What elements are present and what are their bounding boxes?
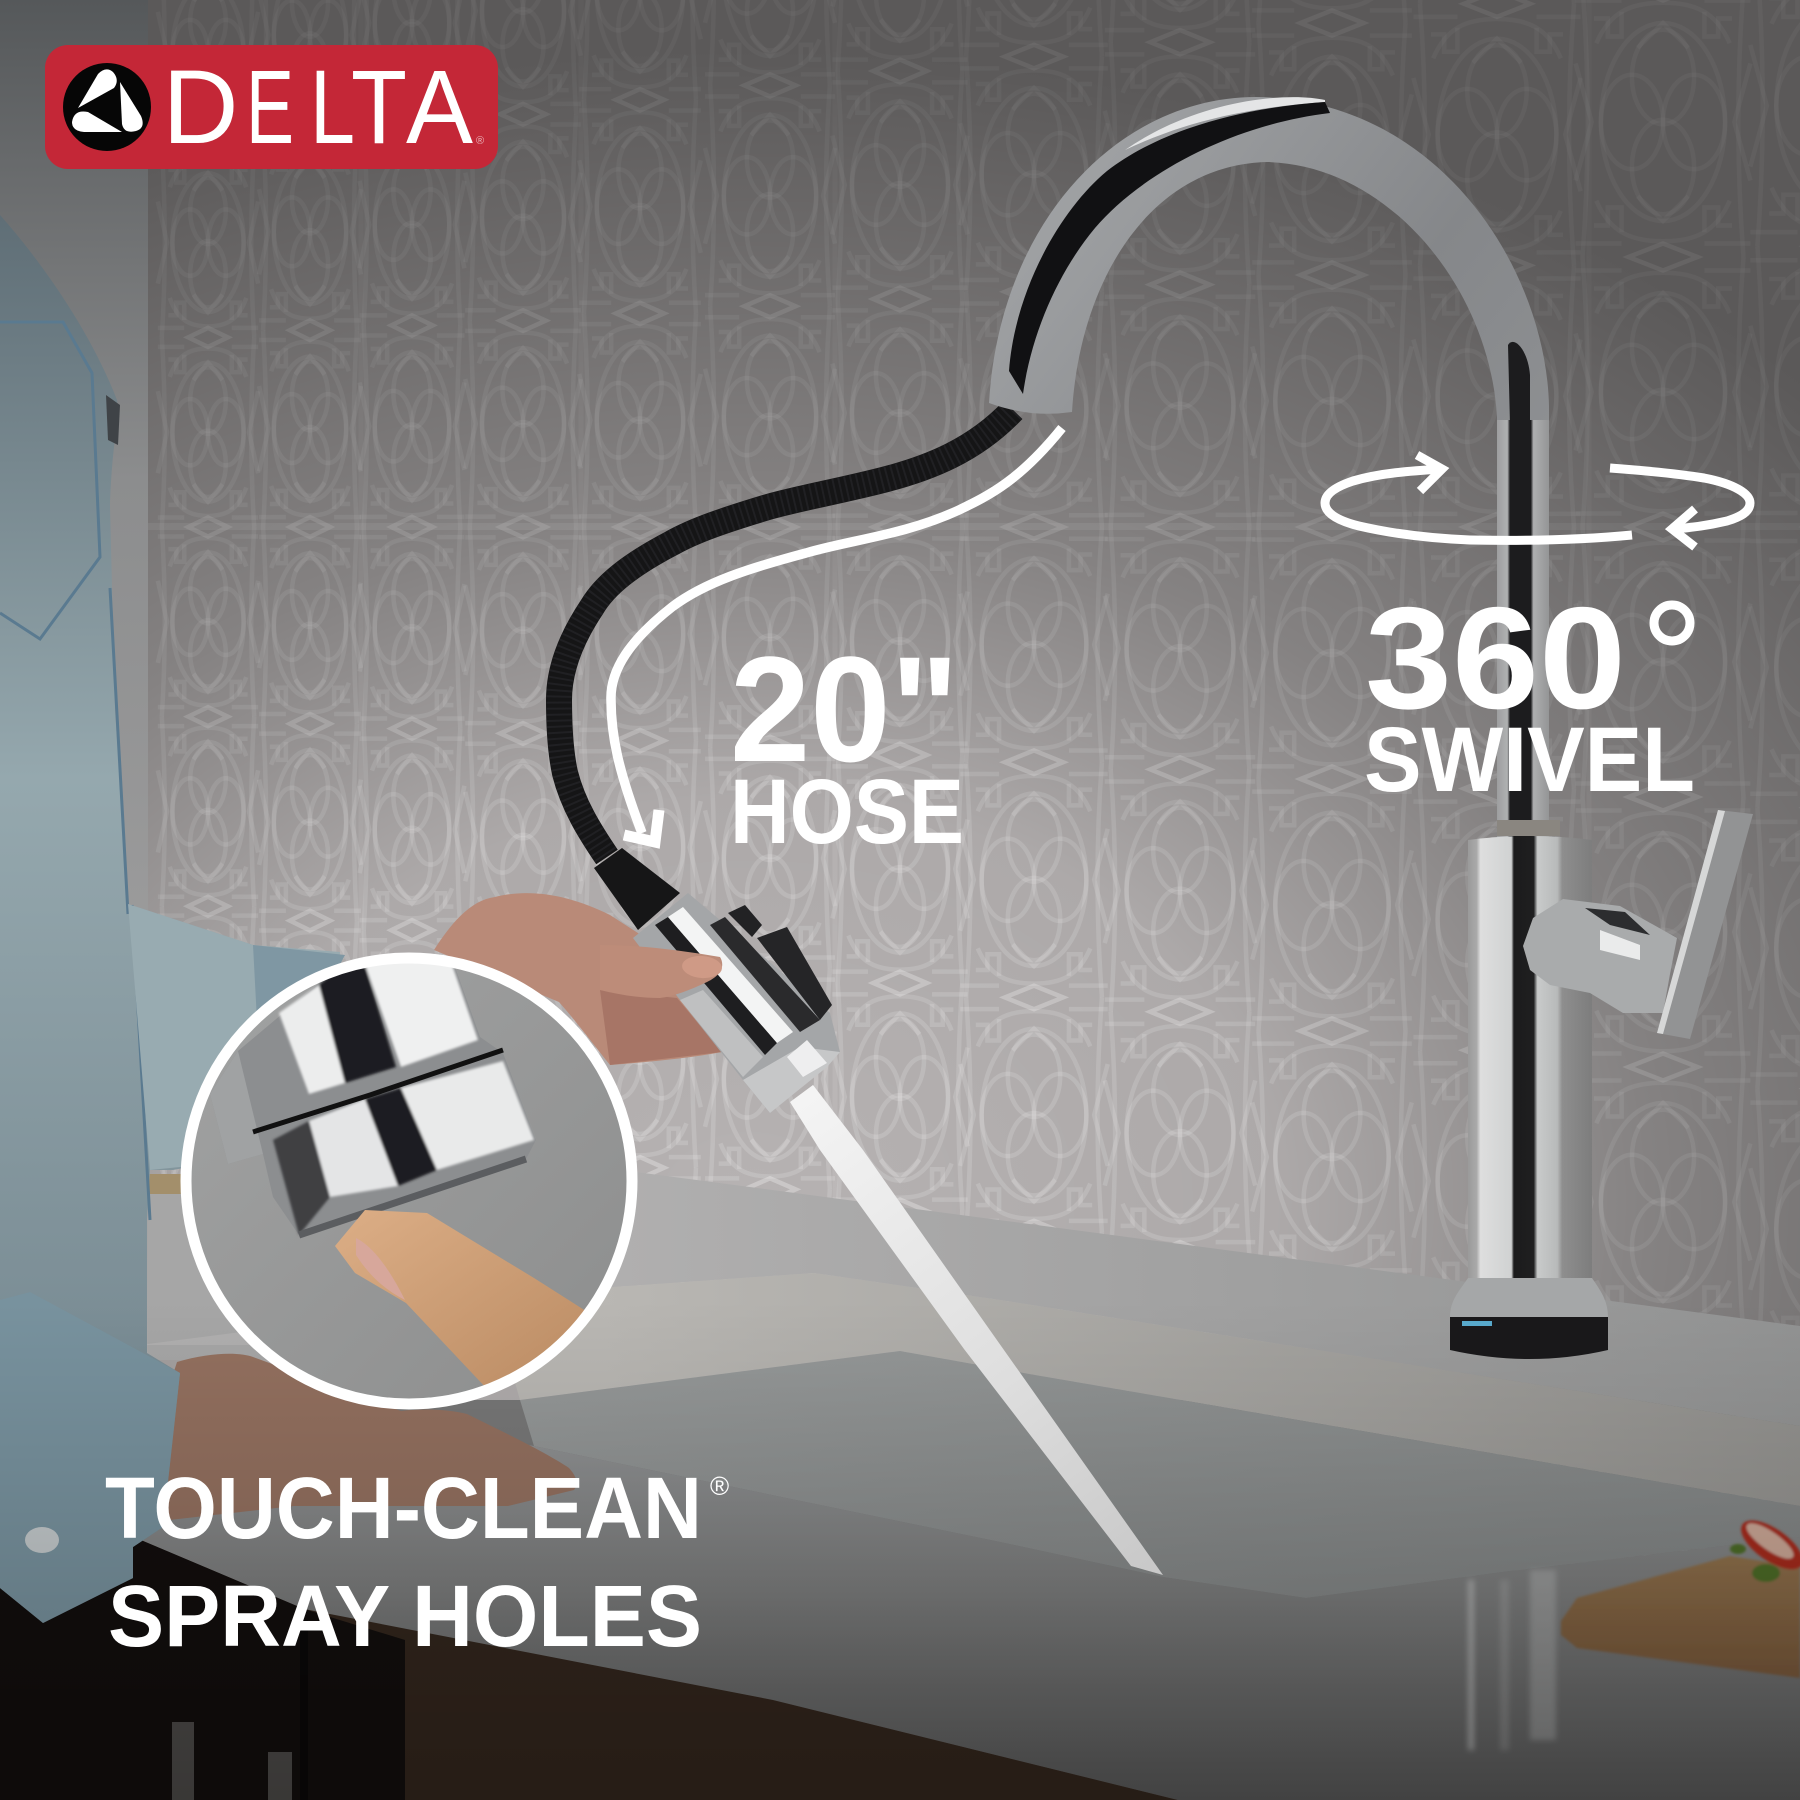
360 swivel label <box>1364 577 1695 811</box>
front counter <box>136 1380 1800 1800</box>
back counter surface <box>140 1172 1800 1426</box>
blue indicator <box>1462 1321 1492 1326</box>
hose <box>559 410 1013 857</box>
water stream <box>790 1085 1163 1575</box>
dark panel <box>710 917 820 1032</box>
thumb nail <box>681 955 723 979</box>
faucet body <box>1468 836 1592 1280</box>
hose arrow <box>611 428 1062 842</box>
small button <box>728 905 762 937</box>
shirt collar shadow <box>106 395 120 445</box>
base flange <box>1450 1278 1608 1317</box>
hand holding sprayer <box>434 893 722 1065</box>
light stripe <box>668 907 793 1043</box>
black connector <box>594 848 680 930</box>
20 inch label: 20" <box>730 625 959 793</box>
chrome sprayer close-up <box>238 964 534 1238</box>
20 inch label <box>730 625 964 863</box>
touch-clean label: TOUCH-CLEAN <box>105 1460 702 1557</box>
registered mark: ® <box>476 135 484 147</box>
thumb <box>600 945 722 998</box>
swivel arrows <box>1325 455 1750 547</box>
20 inch label: HOSE <box>730 761 964 863</box>
shirt cuff <box>0 1292 180 1623</box>
shirt <box>0 215 345 1623</box>
sleeve cuff <box>253 945 345 1040</box>
touch-clean label: ® <box>710 1471 729 1501</box>
lower hand on counter <box>125 1354 577 1525</box>
wood shelf edge <box>148 1174 208 1194</box>
counter reflections <box>1468 1570 1556 1750</box>
sprayer head <box>594 848 840 1113</box>
fingertip <box>335 1210 600 1390</box>
shirt button band <box>110 588 150 1220</box>
handle connector <box>1523 899 1677 1013</box>
spout tube <box>989 97 1549 840</box>
wordmark: L <box>310 49 355 166</box>
cutting board <box>1561 1511 1800 1678</box>
lower wall beneath sleeve <box>148 1190 608 1360</box>
360 swivel label: 360 <box>1365 577 1626 739</box>
lower gray band <box>680 990 763 1077</box>
strawberry garnish <box>1730 1511 1800 1582</box>
logo emblem <box>63 63 151 151</box>
wordmark: A <box>406 49 473 166</box>
wordmark: E <box>246 49 294 166</box>
wordmark <box>162 49 473 166</box>
lever handle <box>1657 810 1753 1039</box>
tip ring <box>743 1047 840 1113</box>
sink lip <box>500 1273 1800 1506</box>
black base <box>1450 1317 1608 1359</box>
faucet <box>989 97 1753 1359</box>
touch-clean label: SPRAY HOLES <box>108 1568 702 1665</box>
hose braid <box>559 410 1013 857</box>
cabinet base <box>0 1538 1178 1800</box>
wordmark: D <box>162 49 238 166</box>
wordmark: T <box>351 49 407 166</box>
touch-clean label <box>105 1460 729 1665</box>
360 swivel label: SWIVEL <box>1364 709 1695 811</box>
bottom shadow <box>0 1300 1800 1800</box>
shirt pocket seam <box>0 322 100 639</box>
sleeve <box>128 904 340 1170</box>
rocker button <box>757 927 832 1020</box>
delta logo <box>45 45 498 169</box>
sink basin <box>520 1351 1800 1598</box>
chrome body <box>633 893 840 1113</box>
collar <box>1497 820 1560 836</box>
dark lower band <box>655 917 777 1055</box>
cuff button <box>25 1527 59 1553</box>
magnified lens inset <box>185 950 633 1405</box>
left wall strip <box>0 0 148 1370</box>
